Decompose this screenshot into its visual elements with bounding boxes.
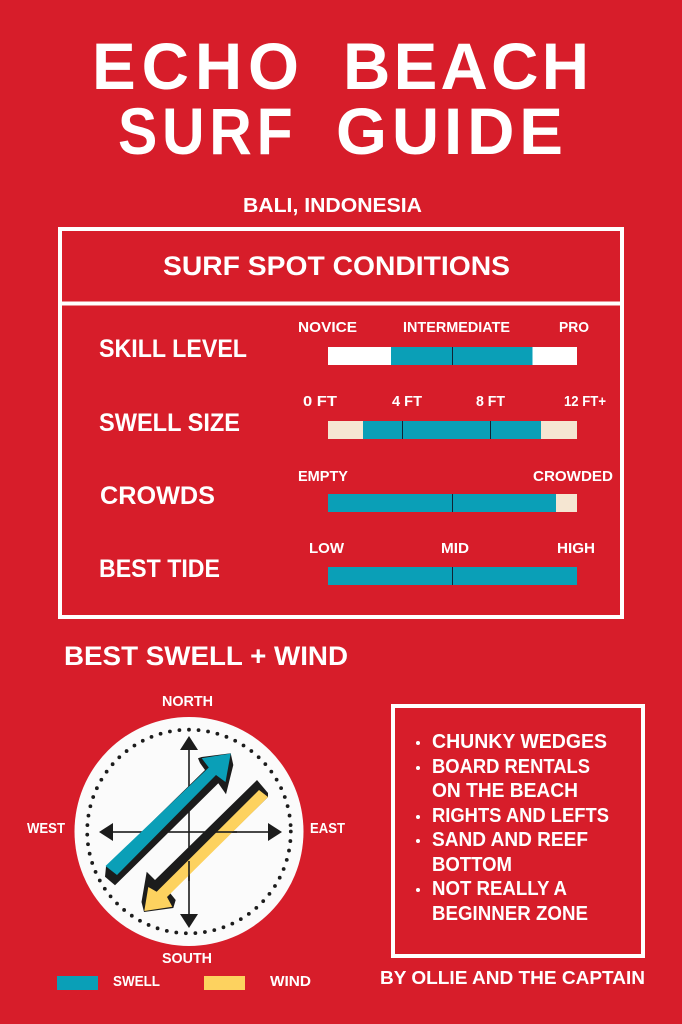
bullet list: SAND AND REEF [432, 829, 588, 851]
row: swell size: 4 FT [392, 393, 422, 410]
row: crowds [100, 468, 613, 512]
bullet list: NOT REALLY A [432, 878, 567, 900]
compass direction labels: EAST [310, 820, 345, 837]
panel: notes [393, 706, 643, 956]
bullet list [416, 731, 609, 925]
compass cross arrows [99, 736, 282, 928]
row: swell size: 12 FT+ [564, 393, 606, 410]
row: skill level: INTERMEDIATE [403, 319, 510, 336]
subtitle: location: BALI, INDONESIA [243, 195, 422, 217]
arrow: wind [142, 780, 268, 912]
row: skill level: PRO [559, 319, 589, 336]
title [92, 30, 589, 169]
compass dial [74, 717, 304, 946]
row: crowds: EMPTY [298, 468, 348, 485]
title: BEACH [343, 30, 589, 103]
bullet list: ON THE BEACH [432, 780, 578, 802]
row: swell size: 0 FT [303, 393, 337, 410]
bullet list: CHUNKY WEDGES [432, 731, 607, 753]
row: skill level: SKILL LEVEL [99, 335, 247, 363]
title: SURF [118, 96, 293, 169]
row: best tide [99, 540, 595, 585]
legend: wind: WIND [270, 973, 311, 990]
row: swell size: 8 FT [476, 393, 505, 410]
row: best tide: MID [441, 540, 469, 557]
panel heading: SURF SPOT CONDITIONS [163, 251, 510, 281]
row: best tide: BEST TIDE [99, 555, 220, 583]
legend: wind [204, 973, 311, 990]
row: skill level [99, 319, 589, 365]
bullet list: RIGHTS AND LEFTS [432, 805, 609, 827]
row: skill level: NOVICE [298, 319, 357, 336]
row: best tide: LOW [309, 540, 345, 557]
heading: best swell and wind: BEST SWELL + WIND [64, 641, 348, 671]
compass direction labels: WEST [27, 820, 65, 837]
legend: swell [57, 973, 160, 990]
compass direction labels: NORTH [162, 693, 213, 710]
title: ECHO [92, 30, 299, 103]
panel: surf spot conditions [60, 229, 622, 617]
legend: swell: SWELL [113, 973, 160, 990]
row: swell size [99, 393, 606, 439]
title: GUIDE [336, 95, 563, 168]
row: swell size: SWELL SIZE [99, 409, 240, 437]
bullet list: BOTTOM [432, 854, 512, 876]
bullet list: BOARD RENTALS [432, 756, 590, 778]
compass direction labels: SOUTH [162, 950, 212, 967]
arrow: swell [105, 753, 233, 885]
credit: BY OLLIE AND THE CAPTAIN [380, 968, 645, 988]
row: best tide: HIGH [557, 540, 595, 557]
compass [27, 693, 345, 967]
row: crowds: CROWDS [100, 482, 215, 510]
bullet list: BEGINNER ZONE [432, 903, 588, 925]
row: crowds: CROWDED [533, 468, 613, 485]
compass direction labels [27, 693, 345, 967]
